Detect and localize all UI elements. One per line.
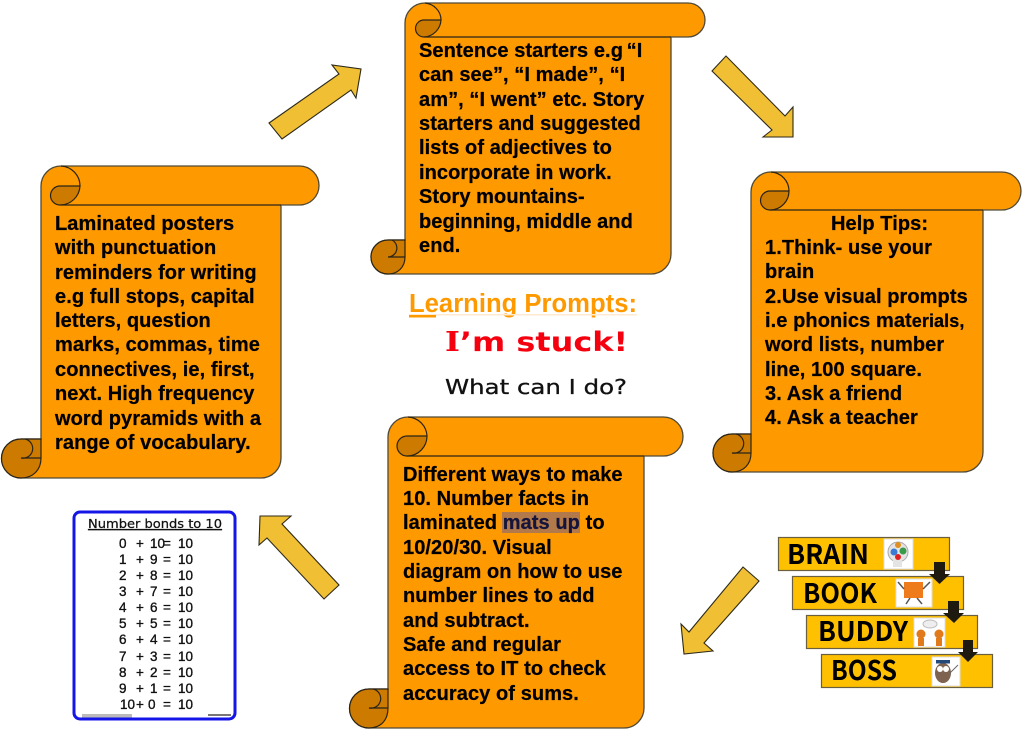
bar: buddy: BUDDY: [818, 610, 908, 649]
text: number facts: laminated: [403, 512, 503, 534]
text: help tips: erials,: [912, 311, 964, 331]
text: number facts: mats up to: [503, 512, 605, 534]
text: laminated posters: e.g full stops, capital: [55, 286, 255, 308]
text: sentence starters: can see”, “I made”, “I: [419, 64, 625, 86]
number bond rows: 10+0=10: [120, 697, 193, 712]
text: laminated posters: with punctuation: [54, 237, 216, 259]
number bond rows: 9+1=10: [119, 681, 193, 696]
highlight: mats up: [502, 512, 580, 533]
number bond rows: 2+8=10: [119, 568, 193, 583]
bar: boss: [822, 649, 992, 688]
subheading: I'm stuck: I’m stuck!: [445, 327, 628, 358]
scroll panel: help tips: [713, 172, 1021, 472]
arrow: buddy to boss: [958, 640, 978, 662]
text: help tips: i.e phonics mat: [765, 310, 912, 332]
text: number facts: and subtract.: [403, 610, 530, 632]
text: sentence starters: Story mountains-: [419, 186, 585, 208]
text: help tips: Help Tips:: [831, 213, 928, 235]
text: laminated posters: next. High frequency: [55, 383, 255, 405]
text: help tips: 1.Think- use your: [765, 237, 932, 259]
text: number facts: Different ways to make: [403, 464, 623, 486]
icon: two people talking: [914, 618, 945, 647]
text: sentence starters: “I: [627, 40, 642, 62]
text: laminated posters: connectives, ie, first,: [55, 359, 255, 381]
bar: brain: BRAIN: [787, 533, 869, 572]
text: help tips: word lists, number: [764, 334, 944, 356]
bar: boss: BOSS: [831, 649, 897, 688]
text: number facts: accuracy of sums.: [403, 683, 579, 705]
text: sentence starters: incorporate in work.: [419, 162, 612, 184]
bar: book: BOOK: [803, 572, 877, 611]
arrow: brain to book: [929, 562, 950, 584]
number bond rows: [119, 536, 193, 712]
number bond rows: 6+4=10: [119, 632, 193, 647]
arrow: sentence starters to help tips: [712, 56, 793, 137]
arrow: posters to sentence starters: [269, 65, 361, 139]
text: laminated posters: marks, commas, time: [55, 334, 260, 356]
number bond rows: 4+6=10: [119, 600, 193, 615]
arrow: book to buddy: [943, 601, 964, 623]
subheading: what can I do: What can I do?: [445, 375, 627, 399]
text: sentence starters: Sentence starters e.g: [419, 40, 629, 62]
icon: head with gears: [884, 539, 913, 569]
text: laminated posters: word pyramids with a: [54, 408, 262, 430]
scroll panel: top sentence starters: [371, 3, 705, 274]
scroll panel: laminated posters: [2, 166, 319, 478]
text: laminated posters: range of vocabulary.: [55, 432, 251, 454]
text: sentence starters: lists of adjectives to: [419, 137, 612, 159]
arrow: brain book buddy boss to number facts: [681, 567, 759, 654]
text: help tips: 2.Use visual prompts: [765, 286, 968, 308]
text: number facts: number lines to add: [403, 585, 595, 607]
number bond rows: 7+3=10: [119, 649, 193, 664]
scroll panel: number facts: [350, 417, 683, 728]
number bond rows: 0+10=10: [119, 536, 193, 551]
heading: learning prompts: Learning Prompts:: [409, 290, 637, 318]
text: sentence starters: starters and suggested: [419, 113, 641, 135]
number bond rows: 8+2=10: [119, 665, 193, 680]
text: laminated posters: Laminated posters: [55, 213, 234, 235]
strategy stack: brain book buddy boss: [778, 533, 992, 688]
bar: book: [792, 572, 964, 611]
icon: owl teacher: [932, 657, 960, 686]
text: help tips: brain: [765, 261, 814, 283]
number bond rows: 1+9=10: [119, 552, 193, 567]
card: number bonds to 10: [74, 512, 235, 719]
text: sentence starters: end.: [419, 235, 460, 257]
text: sentence starters: am”, “I went” etc. Story: [419, 89, 645, 111]
text: number facts: Safe and regular: [403, 634, 561, 656]
text: number facts: 10. Number facts in: [403, 488, 589, 510]
text: number facts: access to IT to check: [403, 658, 607, 680]
text: sentence starters: beginning, middle and: [419, 211, 633, 233]
bar: brain: [778, 533, 950, 572]
number bond rows: 5+5=10: [119, 616, 193, 631]
icon: book character: [896, 579, 932, 607]
text: help tips: line, 100 square.: [765, 359, 922, 381]
text: number facts: diagram on how to use: [403, 561, 622, 583]
number bond rows: 3+7=10: [119, 584, 193, 599]
text: help tips: 4. Ask a teacher: [765, 407, 918, 429]
arrow: number facts to number bonds: [259, 516, 339, 599]
text: number facts: 10/20/30. Visual: [403, 537, 552, 559]
text: help tips: 3. Ask a friend: [765, 383, 902, 405]
text: laminated posters: reminders for writing: [55, 262, 257, 284]
text: laminated posters: letters, question: [55, 310, 211, 332]
card title: Number bonds to 10: [88, 517, 222, 531]
bar: buddy: [806, 610, 978, 649]
